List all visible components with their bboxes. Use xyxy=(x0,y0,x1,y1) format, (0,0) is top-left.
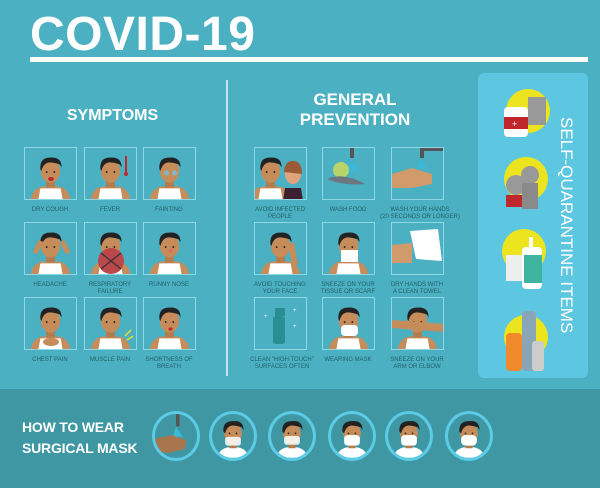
panel: prevention: SURFACES OFTEN xyxy=(255,364,309,370)
symptom: respiratory failure xyxy=(84,222,137,275)
prevention: wash hands xyxy=(391,147,444,200)
panel: symptoms: HEADACHE xyxy=(33,282,67,288)
heading: symptoms: SYMPTOMS xyxy=(67,107,158,124)
prevention: wash food xyxy=(322,147,375,200)
step 6 xyxy=(445,411,493,461)
heading xyxy=(22,419,138,456)
prevention: sneeze on tissue xyxy=(322,222,375,275)
icon: sanitizer xyxy=(502,229,546,289)
icon: water bottles xyxy=(504,311,548,371)
prevention: clean surfaces xyxy=(254,297,307,350)
symptom: headache xyxy=(24,222,77,275)
title xyxy=(30,8,588,62)
panel: prevention: SNEEZE ON YOUR xyxy=(321,282,375,288)
prevention: avoid infected people xyxy=(254,147,307,200)
panel: symptoms: CHEST PAIN xyxy=(32,357,68,363)
heading: general prevention xyxy=(300,90,410,129)
panel: symptoms: MUSCLE PAIN xyxy=(90,357,130,363)
panel: prevention: WEARING MASK xyxy=(324,357,372,363)
prevention: avoid touching face xyxy=(254,222,307,275)
panel: self-quarantine items xyxy=(478,73,588,378)
panel: prevention: CLEAN "HIGH TOUCH" xyxy=(250,357,314,363)
panel: prevention: A CLEAN TOWEL xyxy=(393,289,441,295)
panel: symptoms xyxy=(24,147,196,370)
prevention: clean surfaces: + xyxy=(293,308,297,314)
prevention: wearing mask xyxy=(322,297,375,350)
bottom band: how to wear surgical mask xyxy=(0,389,600,488)
panel: symptoms: FAILURE xyxy=(97,289,122,295)
panel: prevention: WASH YOUR HANDS xyxy=(390,207,450,213)
prevention: clean surfaces: + xyxy=(264,314,268,320)
heading: general prevention: PREVENTION xyxy=(300,110,410,129)
heading: general prevention: GENERAL xyxy=(313,90,397,109)
panel: symptoms: SHORTNESS OF xyxy=(145,357,193,363)
symptom: shortness of breath xyxy=(143,297,196,350)
step 4 xyxy=(328,411,376,461)
title: COVID-19 xyxy=(30,8,255,61)
symptom: muscle pain xyxy=(84,297,137,350)
step 1: wash hands xyxy=(152,411,200,461)
icon: food cans xyxy=(504,157,548,209)
prevention: clean surfaces: + xyxy=(293,324,297,330)
divider xyxy=(226,80,228,376)
panel: symptoms: RUNNY NOSE xyxy=(149,282,189,288)
panel: symptoms: RESPIRATORY xyxy=(89,282,131,288)
panel: prevention: WASH FOOD xyxy=(330,207,366,213)
panel: prevention: SNEEZE ON YOUR xyxy=(390,357,444,363)
symptom: dry cough xyxy=(24,147,77,200)
panel: prevention xyxy=(250,147,460,370)
symptom: fever xyxy=(84,147,137,200)
step 2 xyxy=(209,411,257,461)
step 5 xyxy=(385,411,433,461)
panel: prevention: YOUR FACE xyxy=(263,289,297,295)
symptom: chest pain xyxy=(24,297,77,350)
panel: symptoms: FAINTING xyxy=(155,207,183,213)
step 3 xyxy=(268,411,316,461)
symptom: runny nose xyxy=(143,222,196,275)
heading: HOW TO WEAR xyxy=(22,419,124,435)
panel: prevention: (20 SECONDS OR LONGER) xyxy=(380,214,460,220)
heading: SURGICAL MASK xyxy=(22,440,137,456)
panel: symptoms: BREATH xyxy=(157,364,181,370)
panel: prevention: DRY HANDS WITH xyxy=(391,282,443,288)
panel: prevention: ARM OR ELBOW xyxy=(393,364,441,370)
icon: medicine xyxy=(504,89,550,137)
vertical text: SELF-QUARANTINE ITEMS xyxy=(557,117,576,333)
panel: symptoms: FEVER xyxy=(100,207,120,213)
icon: medicine: + xyxy=(512,119,517,129)
prevention: dry hands xyxy=(391,222,444,275)
panel: prevention: PEOPLE xyxy=(268,214,292,220)
panel: prevention: TISSUE OR SCARF xyxy=(321,289,375,295)
symptom: fainting xyxy=(143,147,196,200)
panel: prevention: AVOID INFECTED xyxy=(255,207,305,213)
panel: symptoms: DRY COUGH xyxy=(32,207,68,213)
panel: prevention: AVOID TOUCHING xyxy=(254,282,306,288)
prevention: sneeze on elbow xyxy=(391,297,444,350)
